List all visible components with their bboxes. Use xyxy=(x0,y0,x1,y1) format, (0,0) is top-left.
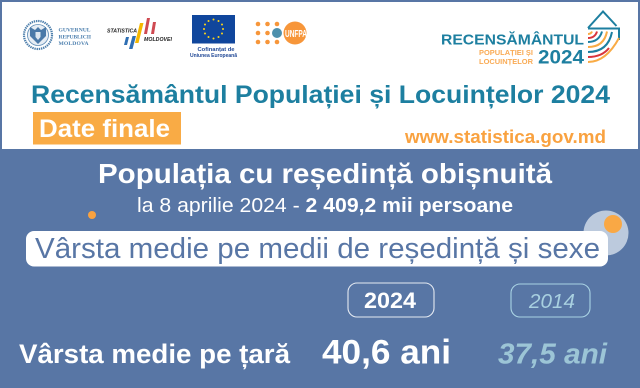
year label: 2024 xyxy=(348,283,434,317)
panel: white header xyxy=(2,2,638,149)
logo: Statistica Moldovei: MOLDOVEI xyxy=(144,37,173,43)
title: Recensământul Populației și Locuințelor 2024 xyxy=(31,81,610,109)
logo: Recensământul 2024: POPULAȚIEI ȘI xyxy=(479,48,533,57)
website: www.statistica.gov.md xyxy=(404,127,606,147)
logo: European Union flag: Cofinanțat de xyxy=(198,47,234,53)
logo: European Union flag: Uniunea Europeană xyxy=(190,53,238,59)
logo: Guvernul Republicii Moldova: GUVERNUL xyxy=(58,28,91,34)
logo: UNFPA: UNFPA xyxy=(285,28,307,40)
logo: Guvernul Republicii Moldova xyxy=(24,21,91,49)
value: 2024: 40,6 ani xyxy=(322,334,451,372)
logo: Statistica Moldovei xyxy=(107,18,173,49)
logo: European Union flag xyxy=(190,15,238,59)
heading: population: Populația cu reședință obișnuită xyxy=(98,158,552,189)
subheading: date and total: la 8 aprilie 2024 - 2 409,2 mii persoane xyxy=(137,195,513,217)
banner: average age: Vârsta medie pe medii de reședință și sexe xyxy=(35,233,600,265)
logo: Recensământul 2024: LOCUINȚELOR xyxy=(479,57,534,66)
logo: Guvernul Republicii Moldova: REPUBLICII xyxy=(58,34,91,40)
icon: house with stripes xyxy=(588,12,619,62)
decorative circles: right xyxy=(584,210,628,256)
logo: Recensământul 2024: RECENSĂMÂNTUL xyxy=(441,30,584,48)
logo: Statistica Moldovei: STATISTICA xyxy=(107,28,137,34)
year label: 2014: 2014 xyxy=(528,291,575,313)
logo: UNFPA xyxy=(256,22,307,44)
value: 2014: 37,5 ani xyxy=(498,338,608,370)
year label: 2014 xyxy=(511,284,590,317)
logo: Recensământul 2024 xyxy=(441,12,619,68)
logo: Guvernul Republicii Moldova: MOLDOVA xyxy=(58,41,88,47)
year label: 2024: 2024 xyxy=(364,288,416,313)
decorative dot: orange left xyxy=(88,211,96,219)
row label: national average age: Vârsta medie pe țară xyxy=(19,338,291,369)
badge: Date finale: Date finale xyxy=(39,116,170,143)
logo: Recensământul 2024: 2024 xyxy=(538,46,584,68)
